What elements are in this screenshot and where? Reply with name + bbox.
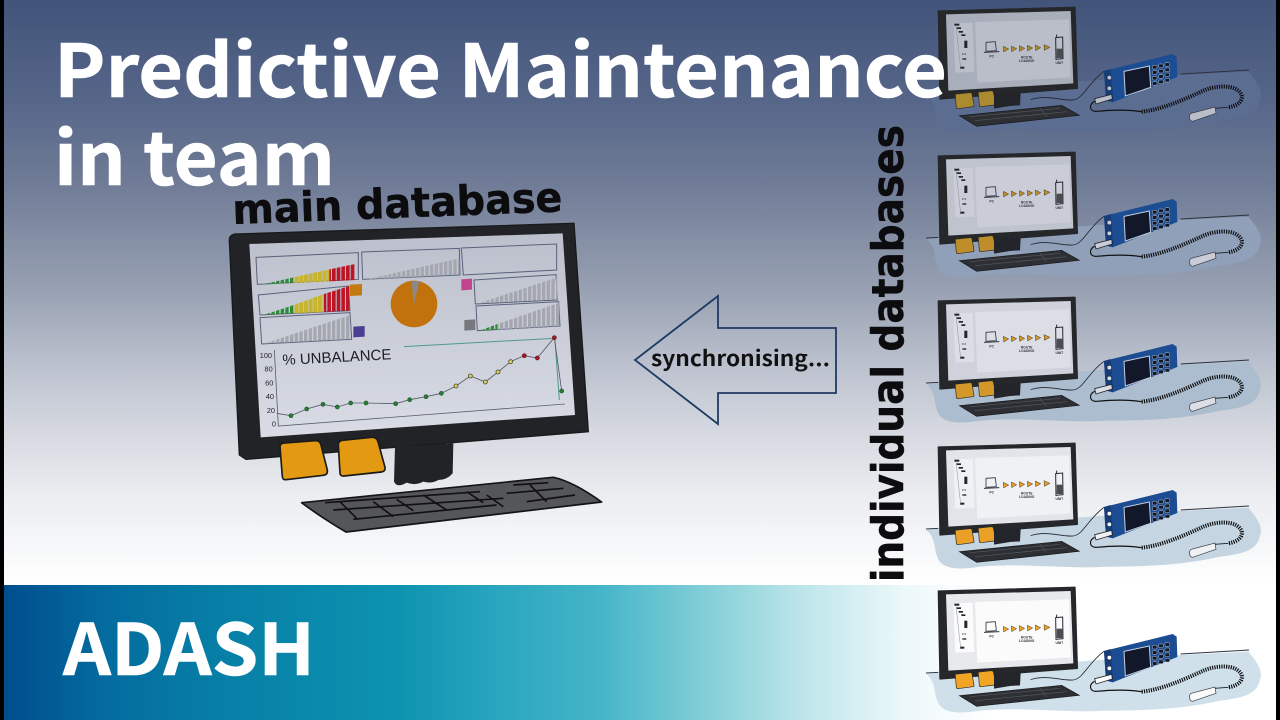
heading: individual databases: individual databases — [863, 125, 914, 582]
station 5: LOADING — [1019, 639, 1035, 643]
station 3: PC — [989, 344, 995, 348]
station 5: PC — [989, 634, 995, 638]
monitor stand — [394, 443, 453, 485]
station 1: ROUTE — [1021, 55, 1033, 59]
left edge strip — [0, 0, 4, 720]
title: in team — [54, 101, 335, 207]
unbalance line chart: 80 — [265, 365, 273, 374]
station 5 — [926, 587, 1261, 712]
unbalance line chart: 100 — [260, 351, 272, 360]
right edge strip — [1276, 0, 1280, 720]
station 2: PC — [989, 199, 995, 203]
main database computer — [229, 223, 602, 532]
unbalance line chart: % UNBALANCE — [282, 346, 392, 369]
arrow: synchronising — [635, 296, 836, 424]
station 5: ROUTE — [1021, 635, 1033, 639]
heading: main database: main database — [232, 173, 563, 234]
brand name: ADASH: ADASH — [62, 594, 315, 696]
sticky notes — [280, 437, 385, 480]
station 5: UNIT — [1055, 641, 1063, 645]
monitor frame — [229, 223, 588, 459]
station 1: UNIT — [1055, 61, 1063, 65]
station 1: LOADING — [1019, 59, 1035, 63]
gauge panels — [256, 244, 560, 344]
station 2: LOADING — [1019, 204, 1035, 208]
unbalance line chart — [260, 336, 565, 429]
station 1 — [926, 7, 1261, 132]
station 4: PC — [989, 490, 995, 494]
monitor screen — [249, 233, 575, 437]
keyboard — [302, 477, 602, 532]
station 4: UNIT — [1055, 497, 1063, 501]
station 2: UNIT — [1055, 206, 1063, 210]
unbalance line chart: 0 — [272, 420, 276, 429]
title: Predictive Maintenance — [54, 13, 947, 119]
station 3: UNIT — [1055, 351, 1063, 355]
station 2: ROUTE — [1021, 200, 1033, 204]
gauge bars — [263, 258, 559, 343]
station 4 — [926, 443, 1261, 568]
unbalance line chart: 40 — [266, 392, 274, 401]
title — [54, 13, 947, 207]
legend squares — [350, 279, 475, 337]
station 4: LOADING — [1019, 495, 1035, 499]
station 3: LOADING — [1019, 349, 1035, 353]
station 1: PC — [989, 54, 995, 58]
station 3: ROUTE — [1021, 345, 1033, 349]
unbalance line chart: 20 — [267, 406, 275, 415]
pie chart — [391, 281, 437, 327]
station 3 — [926, 297, 1261, 422]
station 4: ROUTE — [1021, 491, 1033, 495]
station 2 — [926, 152, 1261, 277]
unbalance line chart: 60 — [265, 378, 273, 387]
arrow: synchronising: synchronising... — [651, 343, 830, 373]
bottom banner — [0, 585, 1280, 720]
